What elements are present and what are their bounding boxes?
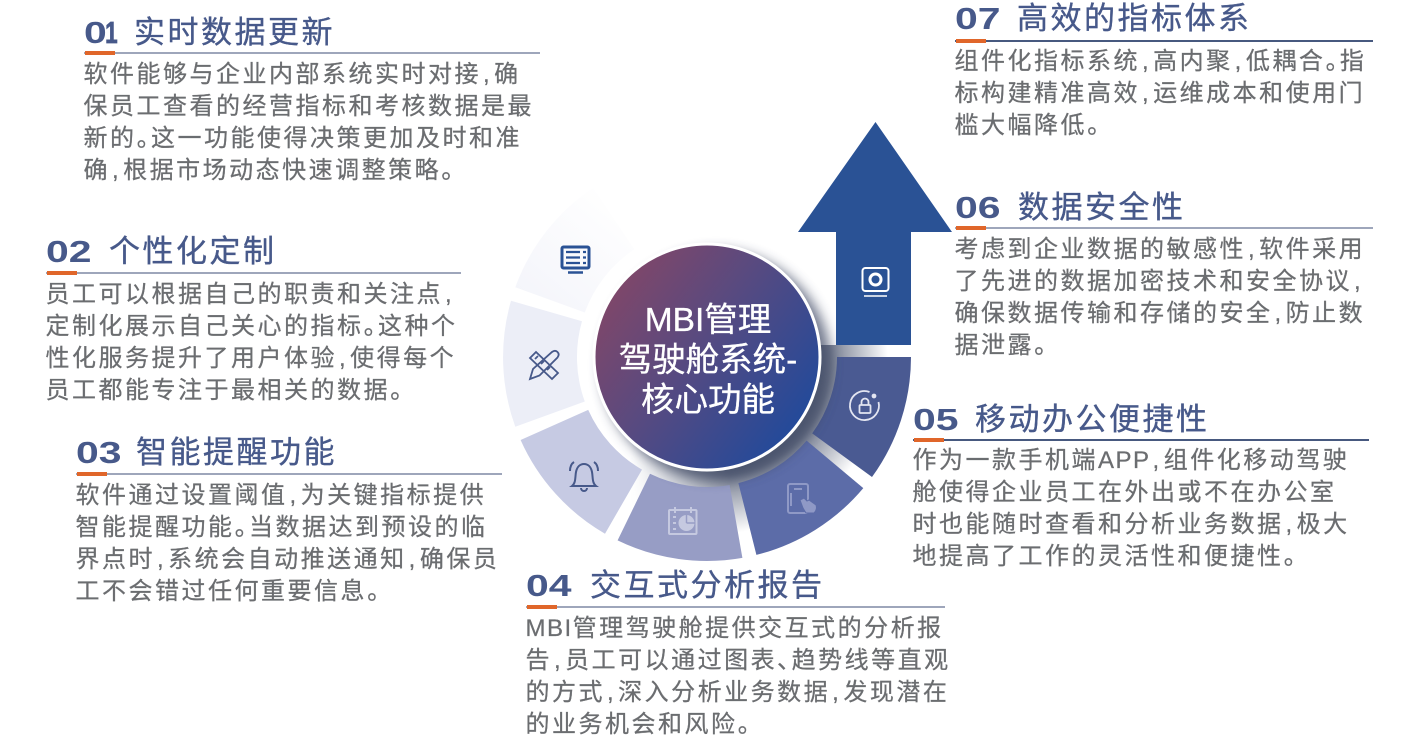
text block 01: 保员工查看的经营指标和考核数据是最 — [84, 93, 534, 120]
heading 05: 移动办公便捷性 — [975, 402, 1210, 437]
central diagram: arrow, ring and hub — [503, 122, 952, 561]
text block 04 — [526, 615, 951, 738]
hub title: 核心功能 — [641, 382, 775, 419]
heading 02: 个性化定制 — [109, 234, 276, 269]
hub — [594, 244, 820, 470]
icon: pencil and ruler — [530, 351, 559, 379]
text block 06: 确保数据传输和存储的安全,防止数 — [954, 300, 1365, 327]
text block 06: 据泄露。 — [954, 332, 1048, 359]
text block 02 — [46, 281, 458, 404]
ring segment: calendar — [618, 474, 742, 561]
text block 04: 告,员工可以通过图表、趋势线等直观 — [526, 647, 951, 674]
ring segment: bell — [521, 410, 642, 534]
ring segment: pencil — [503, 301, 585, 427]
hub title: MBI管理 — [645, 302, 771, 339]
number 01: 0 — [84, 15, 107, 50]
hub shadow — [601, 250, 831, 480]
number 01 — [84, 15, 118, 50]
text block 06: 考虑到企业数据的敏感性,软件采用 — [954, 236, 1365, 263]
text block 05 — [912, 447, 1350, 570]
icon: safe screen — [862, 268, 888, 296]
text block 04: 的业务机会和风险。 — [526, 711, 752, 738]
ring segment: lock — [812, 357, 911, 477]
number 02: 02 — [46, 234, 92, 269]
panel: 07 efficient indicator system — [954, 1, 1373, 139]
text block 06 — [954, 236, 1365, 359]
heading 01: 实时数据更新 — [134, 15, 335, 50]
ring segment: mobile — [738, 441, 863, 555]
text block 05: 作为一款手机端APP,组件化移动驾驶 — [912, 447, 1349, 474]
text block 02: 定制化展示自己关心的指标。这种个 — [46, 313, 458, 340]
text block 04: 的方式,深入分析业务数据,发现潜在 — [526, 679, 949, 706]
number 04: 04 — [526, 568, 572, 603]
panel: 06 data security — [954, 190, 1373, 359]
arrow — [798, 122, 952, 345]
ring segment: screen — [515, 188, 634, 312]
number 07: 07 — [955, 1, 1001, 36]
panel: 03 smart reminder — [76, 435, 502, 605]
text block 02: 员工都能专注于最相关的数据。 — [46, 377, 404, 404]
icon: bell — [570, 462, 598, 491]
number 05: 05 — [913, 402, 959, 437]
number 03: 03 — [76, 435, 122, 470]
text block 03: 工不会错过任何重要信息。 — [76, 578, 382, 605]
icon: tablet and hand — [788, 484, 816, 513]
text block 07: 标构建精准高效,运维成本和使用门 — [954, 80, 1365, 107]
icon: calendar chart — [669, 507, 696, 534]
icon: lock — [850, 391, 879, 420]
text block 03: 智能提醒功能。当数据达到预设的临 — [76, 514, 488, 541]
text block 05: 地提高了工作的灵活性和便捷性。 — [912, 543, 1298, 570]
panel: 05 mobile convenience — [912, 402, 1369, 570]
text block 07: 槛大幅降低。 — [954, 112, 1102, 139]
panel: 01 real-time data update — [84, 15, 540, 184]
number 06: 06 — [955, 190, 1001, 225]
text block 03: 软件通过设置阈值,为关键指标提供 — [76, 482, 486, 509]
icon: monitor — [562, 247, 589, 272]
text block 01: 新的。这一功能使得决策更加及时和准 — [84, 125, 522, 152]
panel: 04 interactive analysis report — [526, 568, 951, 738]
heading 06: 数据安全性 — [1018, 190, 1186, 225]
text block 05: 舱使得企业员工在外出或不在办公室 — [912, 479, 1336, 506]
text block 01: 软件能够与企业内部系统实时对接,确 — [84, 61, 521, 88]
heading 03: 智能提醒功能 — [136, 435, 337, 470]
hub title — [619, 302, 797, 419]
text block 03: 界点时,系统会自动推送通知,确保员 — [76, 546, 499, 573]
soft shadow under ring — [638, 345, 884, 529]
panel: 02 personalized customization — [46, 234, 461, 404]
text block 06: 了先进的数据加密技术和安全协议, — [954, 268, 1363, 295]
text block 05: 时也能随时查看和分析业务数据,极大 — [912, 511, 1350, 538]
heading 04: 交互式分析报告 — [590, 568, 824, 603]
number 01: 1 — [105, 15, 117, 50]
heading 07: 高效的指标体系 — [1017, 1, 1252, 36]
text block 07: 组件化指标系统,高内聚,低耦合。指 — [954, 48, 1366, 75]
text block 02: 员工可以根据自己的职责和关注点, — [46, 281, 454, 308]
text block 01: 确,根据市场动态快速调整策略。 — [84, 157, 456, 184]
text block 02: 性化服务提升了用户体验,使得每个 — [46, 345, 456, 372]
text block 03 — [76, 482, 499, 605]
hub title: 驾驶舱系统- — [619, 342, 797, 379]
text block 04: MBI管理驾驶舱提供交互式的分析报 — [526, 615, 944, 642]
text block 01 — [84, 61, 534, 184]
text block 07 — [954, 48, 1366, 139]
